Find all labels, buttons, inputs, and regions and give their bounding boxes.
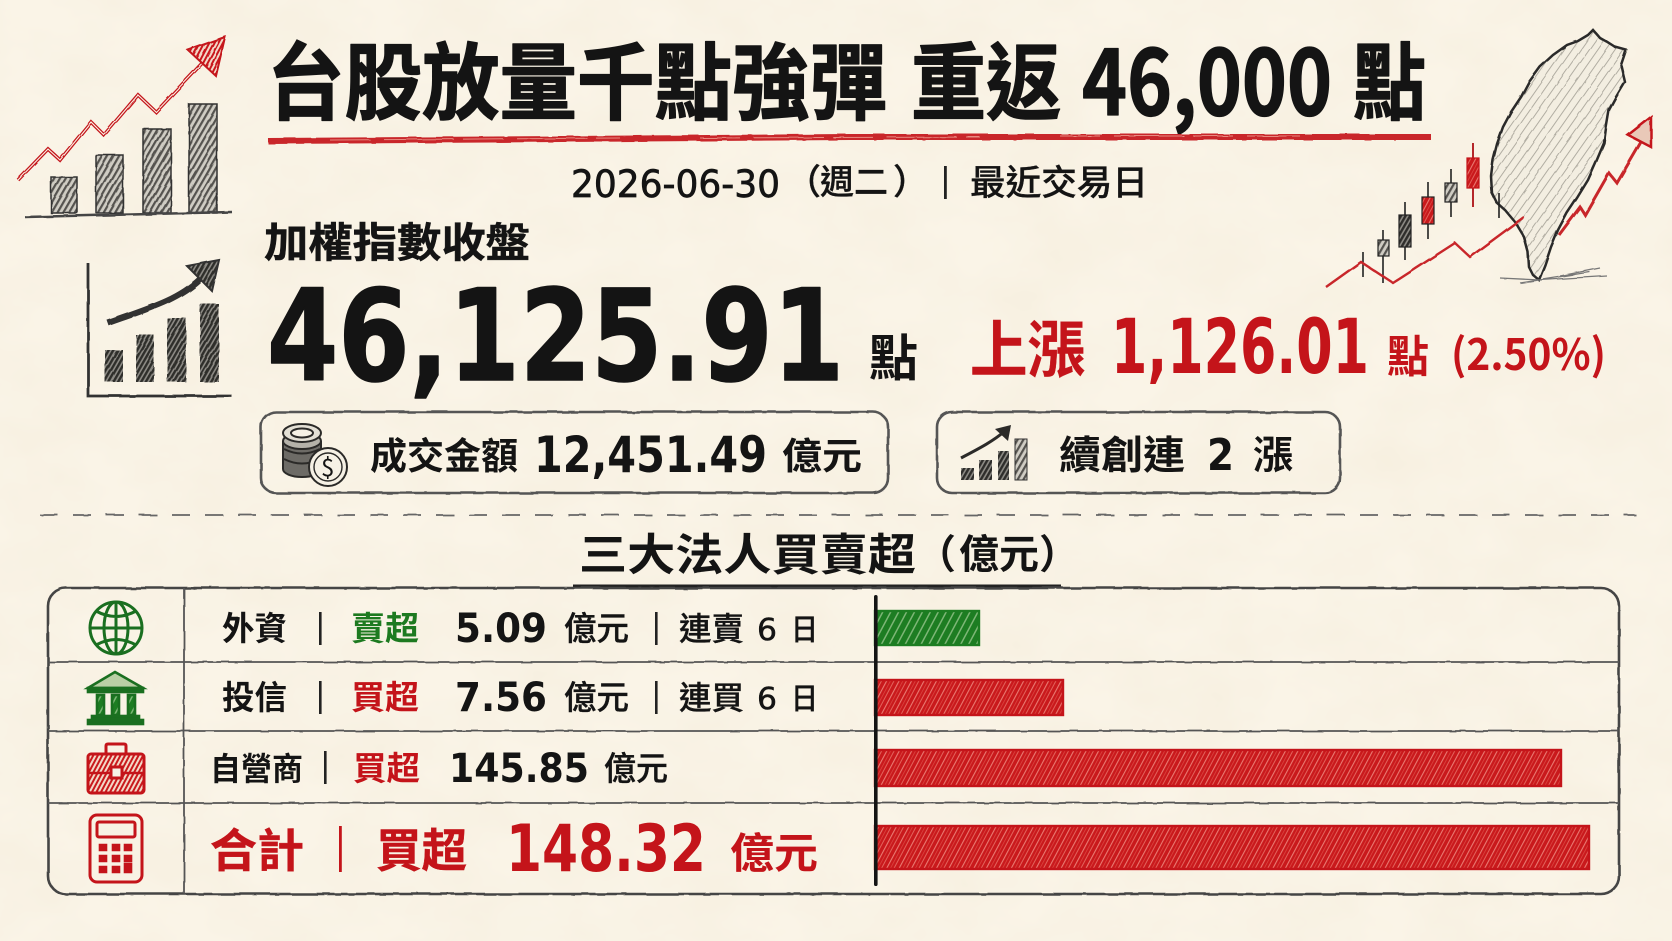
change: (2.50%) [1451,321,1606,383]
row: foreign investors: 賣超 [351,602,419,650]
change [970,300,1606,391]
pill: consecutive rises [937,412,1340,493]
icon: calculator [90,815,142,882]
change: 上漲 [970,300,1085,390]
icon: coins [283,424,347,486]
label: index close: 加權指數收盤 [264,209,530,269]
title: 點 [1353,17,1426,138]
pill: turnover [261,412,888,493]
title underline [268,136,1431,141]
date line: 週二 [820,155,888,204]
date line: ） [893,154,928,205]
row: investment trust: 7.56 [455,675,547,721]
icon: index chart with dark arrow [88,260,232,396]
pill: turnover: 12,451.49 [534,426,767,484]
index value: 46,125.91 [267,262,844,410]
row: foreign investors: 連賣 [679,604,744,650]
section heading: （ [916,522,956,580]
row: total: 買超 [376,815,467,881]
icon: globe [90,602,142,654]
date line: 最近交易日 [970,155,1148,206]
row: investment trust [88,671,818,724]
row: total: 億元 [730,820,818,881]
row: investment trust: 連買 [679,673,744,719]
bar: total [875,826,1589,869]
row: dealers: 自營商 [210,744,303,790]
row: dealers [88,742,668,793]
row: dealers: 買超 [353,742,420,790]
pill: turnover: 成交金額 [370,426,518,480]
row: total [90,812,818,887]
row: foreign investors: 日 [791,605,818,649]
panel: institutional table [48,588,1619,894]
title: 重返 [911,17,1061,138]
pill: turnover: 億元 [782,426,862,480]
section heading: ） [1039,522,1079,580]
section heading [573,519,1079,586]
date line: （ [786,154,821,205]
row: investment trust: 日 [791,674,818,718]
row: dealers: 億元 [604,742,668,790]
bar: foreign investors [875,611,979,645]
icon: briefcase [88,744,144,793]
row: foreign investors: 6 [757,613,777,648]
row: investment trust: 投信 [222,671,287,719]
pill: consecutive rises: 2 [1207,430,1234,481]
icon: coins: $ [321,448,334,483]
illustration: Taiwan map with candlesticks [1326,30,1651,287]
pill: consecutive rises: 續創連 [1059,425,1185,481]
row: foreign investors: 5.09 [455,606,547,652]
icon: rising bars with red arrow [18,37,232,217]
date line: 2026-06-30 [571,163,780,206]
change: 1,126.01 [1111,302,1369,391]
title [267,11,1426,141]
title: 46,000 [1082,11,1332,141]
row: investment trust: 買超 [351,671,419,719]
title: 台股放量千點強彈 [267,17,887,138]
row: investment trust: 6 [757,682,777,717]
bar: investment trust [875,680,1063,715]
row: foreign investors: 億元 [564,602,629,650]
Taiwan island [1491,30,1626,283]
row: total: 合計 [210,815,304,881]
pill: consecutive rises: 漲 [1253,425,1293,481]
row: dealers: 145.85 [449,746,589,792]
date line [571,154,1148,206]
section heading: 三大法人買賣超 [579,519,916,583]
row: investment trust: 億元 [564,671,629,719]
section heading: 億元 [959,522,1039,580]
row: foreign investors: 外資 [222,602,287,650]
icon: small rising chart [961,425,1027,480]
bar: dealers [875,750,1561,786]
bar chart [874,595,1589,886]
row: total: 148.32 [506,812,706,887]
index value: 點 [869,319,918,391]
candlesticks [1363,143,1499,283]
red trend arrow [1326,117,1651,287]
change: 點 [1387,321,1429,385]
row: foreign investors [90,602,818,654]
icon: bank [88,672,143,724]
